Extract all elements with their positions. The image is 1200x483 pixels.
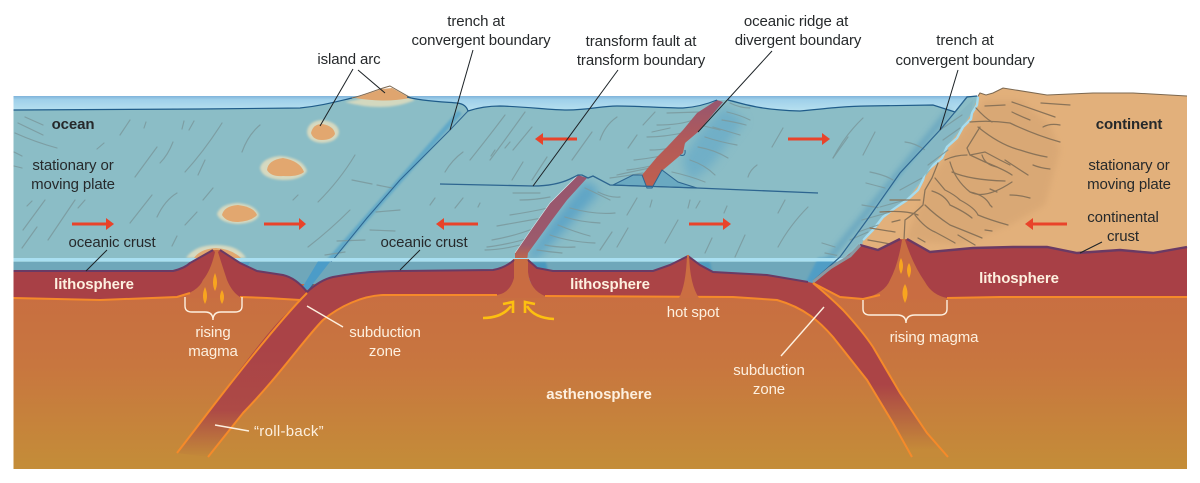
central lithosphere east section with right slab — [528, 256, 948, 457]
transform fault line — [440, 175, 818, 193]
label: lithosphere left: lithosphere — [54, 276, 134, 293]
label: continent: continent — [1096, 116, 1162, 133]
left lithosphere base — [14, 293, 306, 300]
label: stationary or moving plate (continent): moving plate — [1087, 176, 1171, 193]
rising magma flames: right volcano — [899, 258, 911, 303]
label: ocean: ocean — [52, 116, 94, 133]
asthenosphere layer — [14, 262, 1187, 469]
oceanic ridge upper segment — [642, 100, 723, 188]
label: island arc: island arc — [317, 51, 381, 68]
label: continental crust: continental — [1087, 209, 1159, 226]
trench right outline — [813, 97, 967, 281]
left lithosphere crust edge — [14, 250, 307, 292]
label: oceanic crust left: oceanic crust — [68, 234, 156, 251]
island: arc island 5 at section edge — [186, 245, 246, 258]
label: transform fault at transform boundary: transform fault at — [586, 33, 697, 50]
label: lithosphere center: lithosphere — [570, 276, 650, 293]
lithosphere right segment — [813, 239, 1187, 299]
plate motion arrow: upper right — [788, 133, 830, 145]
island: arc island 4 — [217, 203, 259, 224]
rising magma flames: left volcano — [203, 273, 224, 304]
sea-floor grey fracture lines — [14, 103, 925, 257]
label: trench at convergent boundary (left): convergent boundary — [411, 32, 551, 49]
leader lines: white — [215, 306, 824, 431]
label: trench at convergent boundary (right): convergent boundary — [895, 52, 1035, 69]
label: trench at convergent boundary (left): trench at — [447, 13, 506, 30]
ridge basin at transform fault — [613, 170, 697, 188]
continent plate — [860, 88, 1187, 260]
plate motion arrow: lower right — [689, 218, 731, 230]
brace: right rising magma — [863, 300, 947, 323]
label: hot spot: hot spot — [667, 304, 720, 321]
label: stationary or moving plate (continent): stationary or — [1088, 157, 1170, 174]
trench grey lines — [850, 115, 962, 240]
left slab orange edges — [177, 293, 497, 457]
label: oceanic ridge at divergent boundary: divergent boundary — [735, 32, 862, 49]
label: lithosphere right: lithosphere — [979, 270, 1059, 287]
brace: left rising magma — [185, 297, 242, 320]
left volcano plume — [177, 250, 242, 298]
plate motion arrow: lower left — [436, 218, 478, 230]
label: trench at convergent boundary (right): trench at — [936, 32, 995, 49]
label: oceanic ridge at divergent boundary: oceanic ridge at — [744, 13, 849, 30]
right lithosphere base — [813, 283, 1187, 299]
label: oceanic crust center: oceanic crust — [380, 234, 468, 251]
label: rising magma right: rising magma — [890, 329, 979, 346]
continent shaded highlands — [905, 100, 1060, 245]
trench band between coast and plate — [835, 100, 973, 258]
left trench outline — [307, 111, 468, 292]
plate motion arrow: ocean west — [72, 218, 114, 230]
label: continental crust: crust — [1107, 228, 1140, 245]
hot spot plume — [679, 255, 699, 298]
plate motion arrow: continent — [1025, 218, 1067, 230]
oceanic ridge lower segment — [515, 175, 587, 261]
convection arrow: right — [525, 302, 554, 319]
central lithosphere with left slab — [177, 260, 514, 457]
continental drainage lines — [868, 102, 1070, 245]
ridge magma plume — [496, 259, 548, 298]
label: stationary or moving plate (ocean): stationary or — [32, 157, 114, 174]
label: subduction zone right: subduction — [733, 362, 805, 379]
convection arrow: left — [483, 302, 513, 318]
continental crust edge — [860, 239, 1187, 253]
island: arc island 3 — [260, 156, 307, 180]
lithosphere left segment — [14, 250, 307, 300]
island: arc island at surface — [345, 86, 415, 107]
label: subduction zone right: zone — [753, 381, 785, 398]
label: roll-back: “roll-back” — [254, 423, 324, 440]
continental coast highlight — [863, 97, 978, 240]
continent top outline — [978, 88, 1187, 96]
plate motion arrow: ocean east — [264, 218, 306, 230]
cross-section sea band — [14, 258, 844, 290]
ocean top outline — [14, 96, 977, 112]
label: rising magma left: rising — [195, 324, 231, 341]
label: transform fault at transform boundary: transform boundary — [577, 52, 706, 69]
right volcano plume — [863, 239, 947, 300]
sky band above ocean — [14, 96, 978, 114]
island: arc island 2 — [307, 120, 339, 143]
shading: ocean floor depressions — [327, 106, 953, 258]
crust edge on central plate — [307, 256, 808, 292]
plate motion arrow: upper left — [535, 133, 577, 145]
ocean plate surface — [14, 96, 985, 270]
label: subduction zone left: subduction — [349, 324, 421, 341]
label: subduction zone left: zone — [369, 343, 401, 360]
continental margin grey edge — [813, 245, 860, 282]
label: stationary or moving plate (ocean): moving plate — [31, 176, 115, 193]
right slab orange edges — [545, 283, 948, 457]
leader lines: dark — [86, 50, 1102, 271]
label: asthenosphere: asthenosphere — [546, 386, 652, 403]
label: rising magma left: magma — [188, 343, 239, 360]
